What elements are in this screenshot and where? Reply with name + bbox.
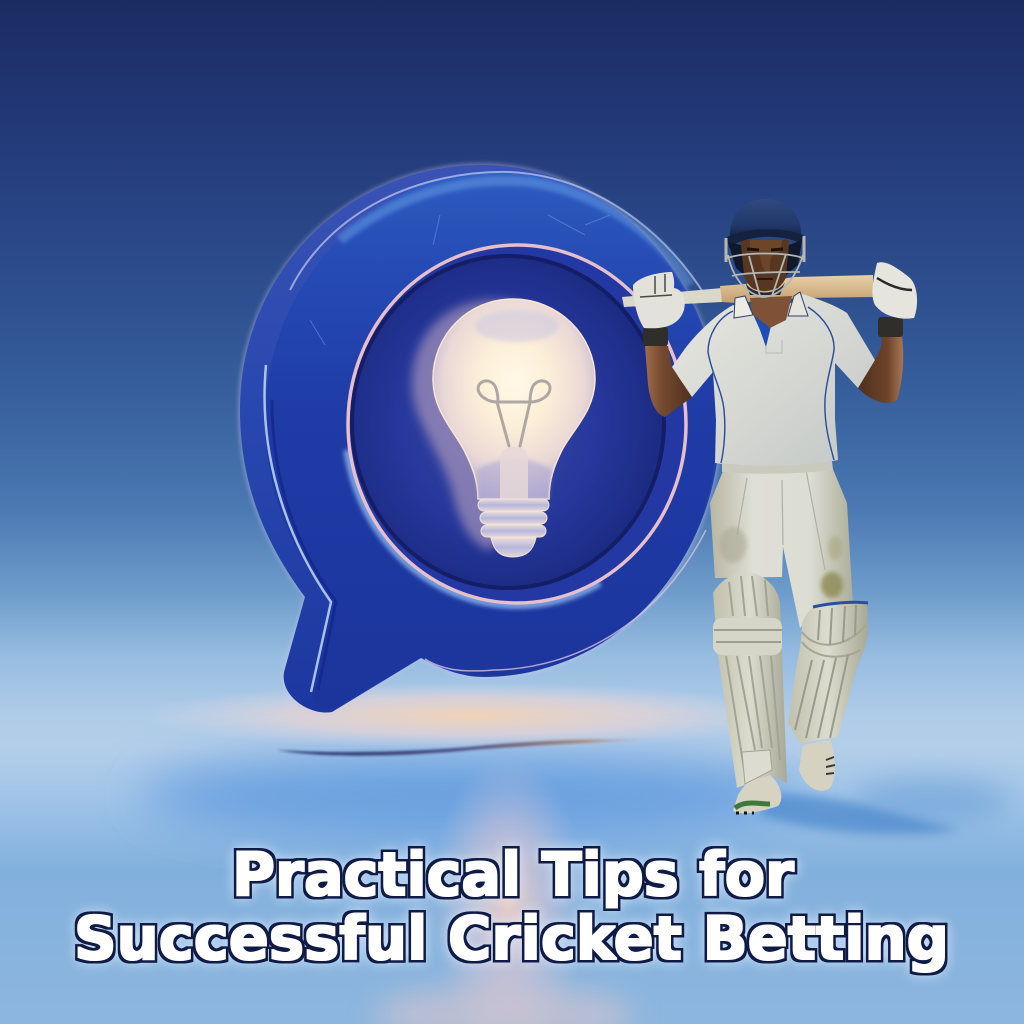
bubble ground shadow (277, 739, 660, 756)
inner bevel highlight (347, 450, 600, 605)
light bulb (412, 299, 595, 557)
collar right (788, 292, 808, 316)
left leg shoe (733, 774, 781, 813)
arm: right forearm (858, 336, 903, 403)
right leg shoe (799, 740, 835, 791)
waistband (722, 461, 833, 474)
collar left (734, 296, 753, 318)
helmet shell (730, 199, 801, 236)
bulb screw base (478, 499, 549, 557)
shirt (672, 292, 875, 467)
bubble front face (265, 172, 718, 709)
title (74, 840, 949, 974)
right wrist band (878, 317, 903, 337)
right glove (872, 262, 917, 319)
bubble outer glow (238, 163, 722, 715)
shirt piping (708, 311, 733, 463)
player ground shadow (760, 794, 960, 834)
right leg pad (788, 602, 868, 743)
bulb ghost halo (412, 300, 560, 550)
chin strap (745, 282, 785, 295)
cricket bat (622, 275, 873, 307)
bulb glass (433, 299, 595, 499)
helmet brim (727, 229, 803, 248)
cricket player (622, 199, 917, 813)
face (740, 240, 790, 291)
title line 2: Successful Cricket Betting (74, 904, 949, 974)
helmet grille (726, 236, 804, 297)
shirt placket (752, 312, 771, 347)
speech bubble with light bulb (238, 163, 722, 715)
arm: left forearm (645, 346, 692, 417)
left glove (633, 272, 685, 328)
bat blade (720, 275, 873, 303)
bulb stem (500, 447, 528, 499)
bulb gloss (475, 310, 559, 342)
left leg pad (713, 572, 787, 788)
bat handle (622, 288, 722, 307)
head and helmet (726, 199, 804, 297)
bulb filament (478, 381, 550, 446)
title line 1: Practical Tips for (232, 840, 794, 910)
inner disc (352, 256, 664, 588)
helmet side shadows (728, 240, 802, 275)
bubble highlights (265, 172, 706, 692)
left wrist band (643, 327, 668, 346)
neck (750, 296, 792, 328)
bubble side wall (240, 165, 720, 713)
trousers (710, 462, 853, 628)
inner glowing rim (348, 245, 686, 603)
bulb lower shading (476, 459, 552, 499)
